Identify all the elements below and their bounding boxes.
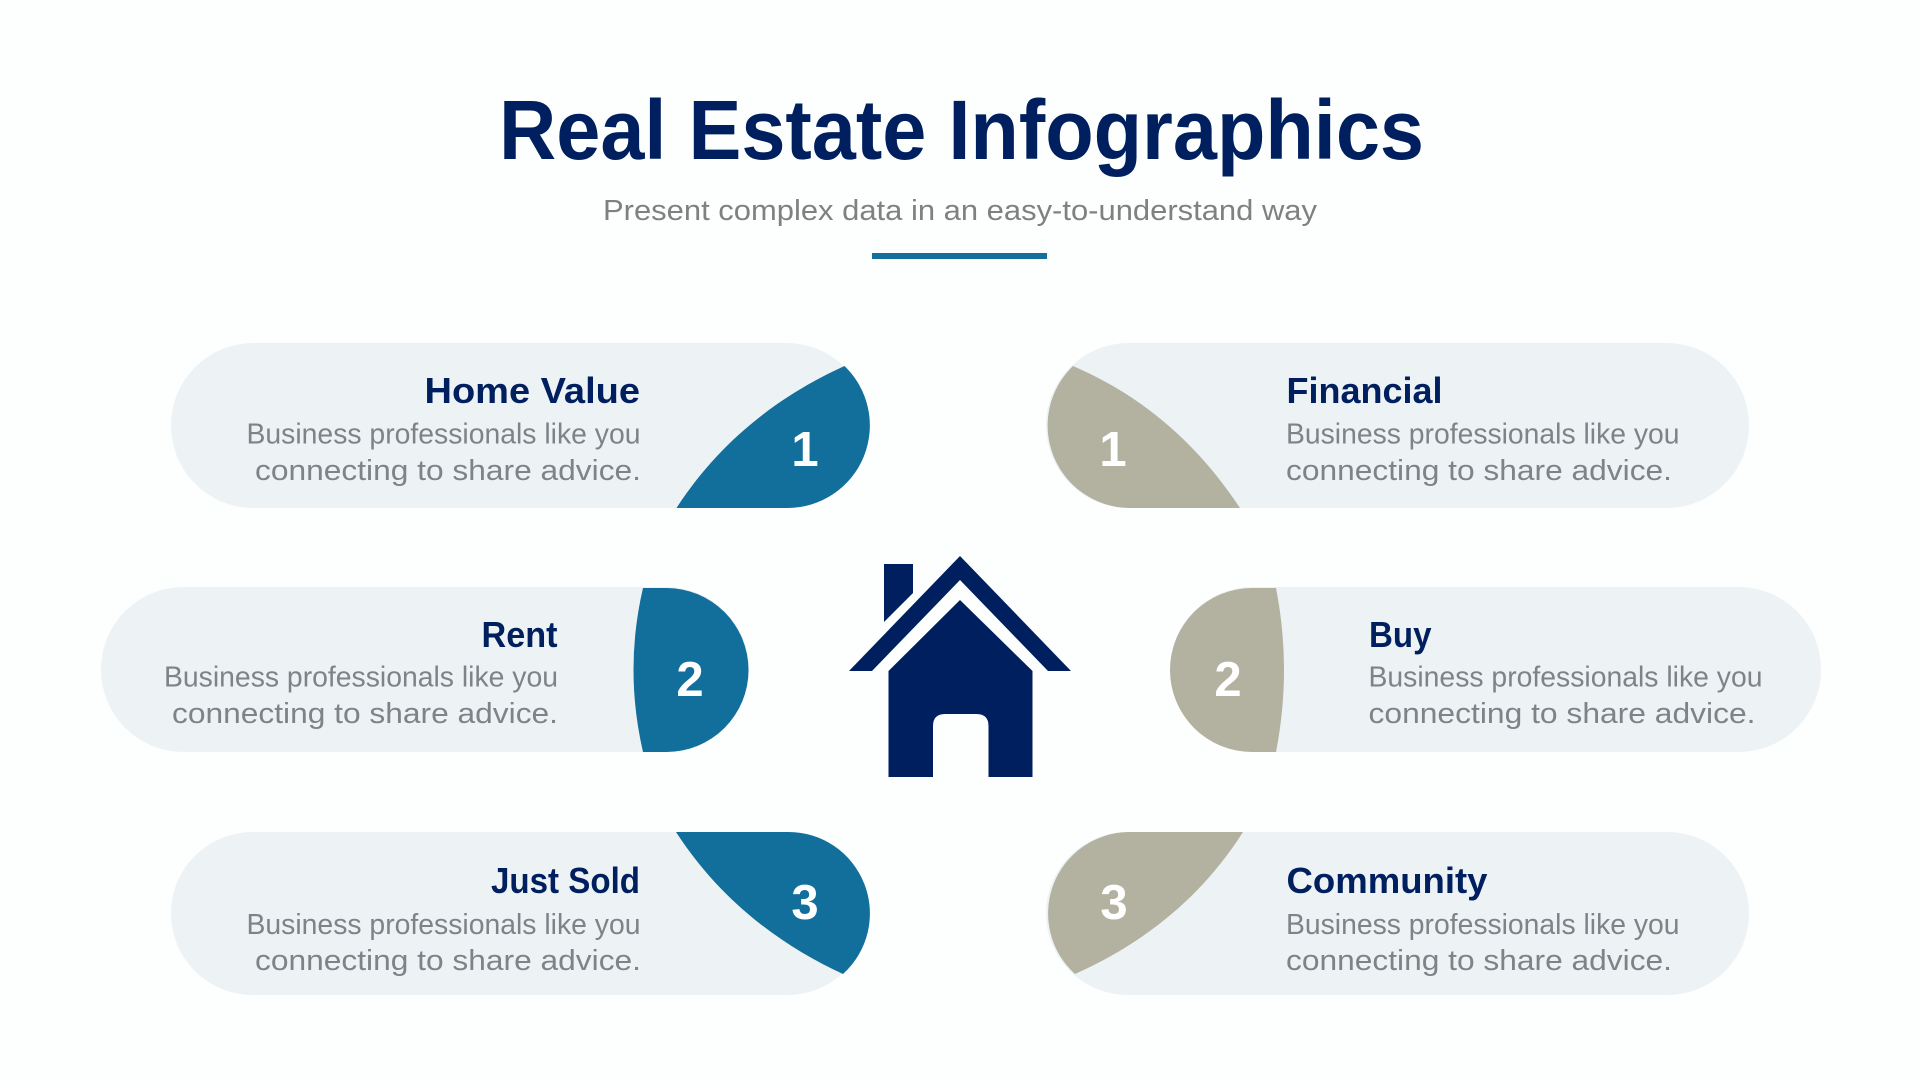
number 3: 3 xyxy=(791,876,819,930)
body text: community: Business professionals like you xyxy=(1286,909,1680,941)
number badge: 1 olive xyxy=(1048,366,1240,508)
body text: just sold xyxy=(246,909,641,977)
number 2: 2 xyxy=(676,653,704,707)
body text: rent: connecting to share advice. xyxy=(172,698,558,730)
number badge: 2 olive xyxy=(1170,588,1284,752)
heading: just sold: Just Sold xyxy=(491,860,640,901)
heading: rent: Rent xyxy=(482,614,558,655)
panel: community xyxy=(1046,832,1749,995)
body text: rent: Business professionals like you xyxy=(164,662,558,694)
body text: financial: connecting to share advice. xyxy=(1286,455,1672,487)
panel: financial xyxy=(1046,343,1749,508)
number 2: 2 xyxy=(1214,653,1242,707)
body text: rent xyxy=(164,662,558,730)
panel: home value xyxy=(171,343,870,508)
body text: buy: Business professionals like you xyxy=(1368,662,1762,694)
number badge: 2 blue xyxy=(634,588,748,752)
heading: home value: Home Value xyxy=(424,370,640,411)
number badge: 1 blue xyxy=(676,366,870,508)
panel: buy xyxy=(1170,587,1821,752)
number badge: 3 olive xyxy=(1048,832,1243,974)
body text: community xyxy=(1286,909,1680,977)
heading: buy: Buy xyxy=(1369,614,1432,655)
body text: community: connecting to share advice. xyxy=(1286,945,1672,977)
body text: financial xyxy=(1286,418,1680,487)
icon: house xyxy=(849,556,1071,777)
title: Real Estate Infographics xyxy=(499,83,1424,177)
panel: rent xyxy=(101,587,749,752)
body text: just sold: connecting to share advice. xyxy=(255,945,641,977)
title divider xyxy=(872,253,1047,259)
body text: home value xyxy=(246,418,641,487)
body text: financial: Business professionals like you xyxy=(1286,418,1680,450)
body text: buy: connecting to share advice. xyxy=(1368,698,1756,730)
panel: just sold xyxy=(171,832,870,995)
body text: buy xyxy=(1368,662,1762,730)
body text: home value: connecting to share advice. xyxy=(255,455,641,487)
body text: just sold: Business professionals like you xyxy=(246,909,640,941)
number 1: 1 xyxy=(791,423,819,477)
subtitle: Present complex data in an easy-to-understand way xyxy=(603,195,1318,227)
number badge: 3 blue xyxy=(676,832,870,974)
heading: community: Community xyxy=(1286,860,1488,901)
number 3: 3 xyxy=(1100,876,1128,930)
heading: financial: Financial xyxy=(1286,370,1442,411)
body text: home value: Business professionals like you xyxy=(246,418,640,450)
number 1: 1 xyxy=(1099,423,1127,477)
